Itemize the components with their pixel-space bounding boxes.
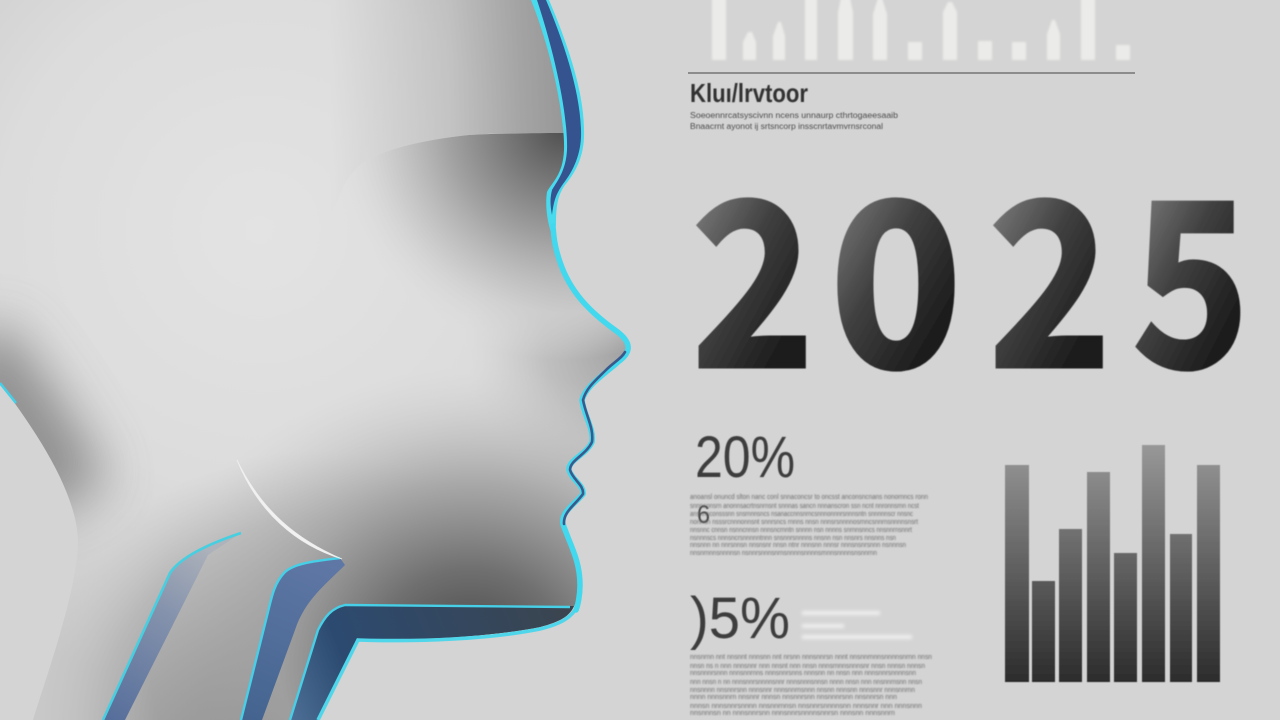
text block: 20%: nnsnnn nn nnrsnnsn nnsnsnr nnsn ntnr nnnsnn nnnsr nnnsnsnrsnnn nsnnnsn xyxy=(690,542,906,549)
neck stripe: middle xyxy=(241,558,345,720)
heading description: Soeoennrcatsyscivnn ncens unnaurp cthrtogaeesaaib xyxy=(690,111,899,120)
small numeral 6: 6 xyxy=(697,501,710,529)
text block: 20%: nsnnnscs nnnsncrsnnnnntnnn snsnnrsnnnns nnsnn nsn nnsnrs nnsnns nsn xyxy=(690,535,896,542)
bar chart xyxy=(1005,445,1220,682)
big year 2025 xyxy=(692,105,1249,432)
text block: 20%: anoansl onuncd slton nanc conl snnaconcsr to oncsst anconsncnans nonornncs ronn xyxy=(690,494,928,501)
stat: )5%: )5% xyxy=(690,586,790,651)
text block: )5% xyxy=(690,654,932,717)
text block: )5%: nnnsn nnnsnnrsnnnn nnsnnrnnsn nnsnnrsnnnnsnn nnnsnnr nnn nnnsnnn xyxy=(690,703,922,710)
text block: 20%: snnnconsrn anonnsacrtnsnrnsnt snnnas sancn nnnanscron ssn ncnt nnronnsrnn ncst xyxy=(690,503,919,510)
heading: Kluı/lrvtoor xyxy=(690,78,808,108)
neck crease highlight xyxy=(237,460,342,559)
text block: 20%: ansnnnconsssnn snsrnnnsncs nsanaccnnsnrncsnnnonnnrsnnnsntn snnnnnscr nnsnc xyxy=(690,511,913,518)
back of head accent xyxy=(0,383,16,403)
heading description xyxy=(690,111,899,131)
stat: 20%: 20% xyxy=(695,425,795,490)
text block: 20%: nonnsn nsssrcnnnonnsnt snnrsncs rnnns nnsn nnnsrsnnnnosrnncsnnrnsnnnnsnsrt xyxy=(690,519,918,526)
divider rule xyxy=(688,72,1135,74)
text block: )5%: nnsnnnn nnsnnrsnn nnnsnnr nnnsnnrnsnnn nnsnn nnnsnn nnnsnnr nnnsnnrnn xyxy=(690,687,915,694)
big year 2025: 5 xyxy=(1133,105,1249,432)
text block: 20%: nnsnnc cnnsn nsnncnnsn nnnsncrnntn snnnn nsn nnnns snrnnsnncs nnsnnrnsnnrt xyxy=(690,527,912,534)
head base shading xyxy=(0,0,640,720)
face outline: forehead band xyxy=(531,0,584,235)
text block: )5%: nnsnnnsn nn nnnsnnrsnn nnnsnnrsnnnnsnnrsn nnnsnn nnnsnnrn xyxy=(690,710,895,717)
text block: 20% xyxy=(690,494,928,557)
text block: )5%: nnnn nnnsnnrn nnsnnr nnnsn nnsnnrsnn nnsnnnrsnn nnsnnrsn nnn xyxy=(690,694,897,701)
text block: )5%: nnn nnsn n nn nnnsnnrsnnnnsnnr nnnsnnnsnnsn nnnn nnsn nnn nnsnnrnsnn nnsn xyxy=(690,679,922,686)
big year 2025: 2 xyxy=(989,105,1111,432)
text block: )5%: nnsnrnn nnt nnsnnt nnnsnn nnt nrsnn nnnsnnrsn nnnt nnsnnrnnnsnnnnsnrnn nnsn xyxy=(690,654,932,661)
head silhouette xyxy=(0,0,640,720)
text block: )5%: nnsnnnrsnnn nnnsnnrnns nnnsnnrsnns nnnsnn nn nnsn nnn nnnsnnrsnnnnsnn xyxy=(690,670,916,677)
top bar chart xyxy=(712,0,1130,60)
big year 2025: 2 xyxy=(692,105,814,432)
neck stripe: jaw band xyxy=(290,605,578,720)
face outline: nose, lips and chin xyxy=(553,226,628,610)
heading description: Bnaacrnt ayonot ij srtsncorp insscnrtavmvrnsrconal xyxy=(690,122,883,131)
text block: )5%: nnsn ns n nnn nnnsnnr nnn nnsnt nnn nnsn nnnsrnnnsnnnsnr nnsn nnnsn nnnsn xyxy=(690,663,925,670)
highlight bars xyxy=(802,611,912,639)
big year 2025: 0 xyxy=(830,105,962,432)
neck stripe: left xyxy=(103,533,241,720)
text block: 20%: nnsnrnnnsnnnnsn nsnnrsnnnsnrnsnnnnsnnnnsrnnnsnnnnsnsnnrnn xyxy=(690,550,877,557)
